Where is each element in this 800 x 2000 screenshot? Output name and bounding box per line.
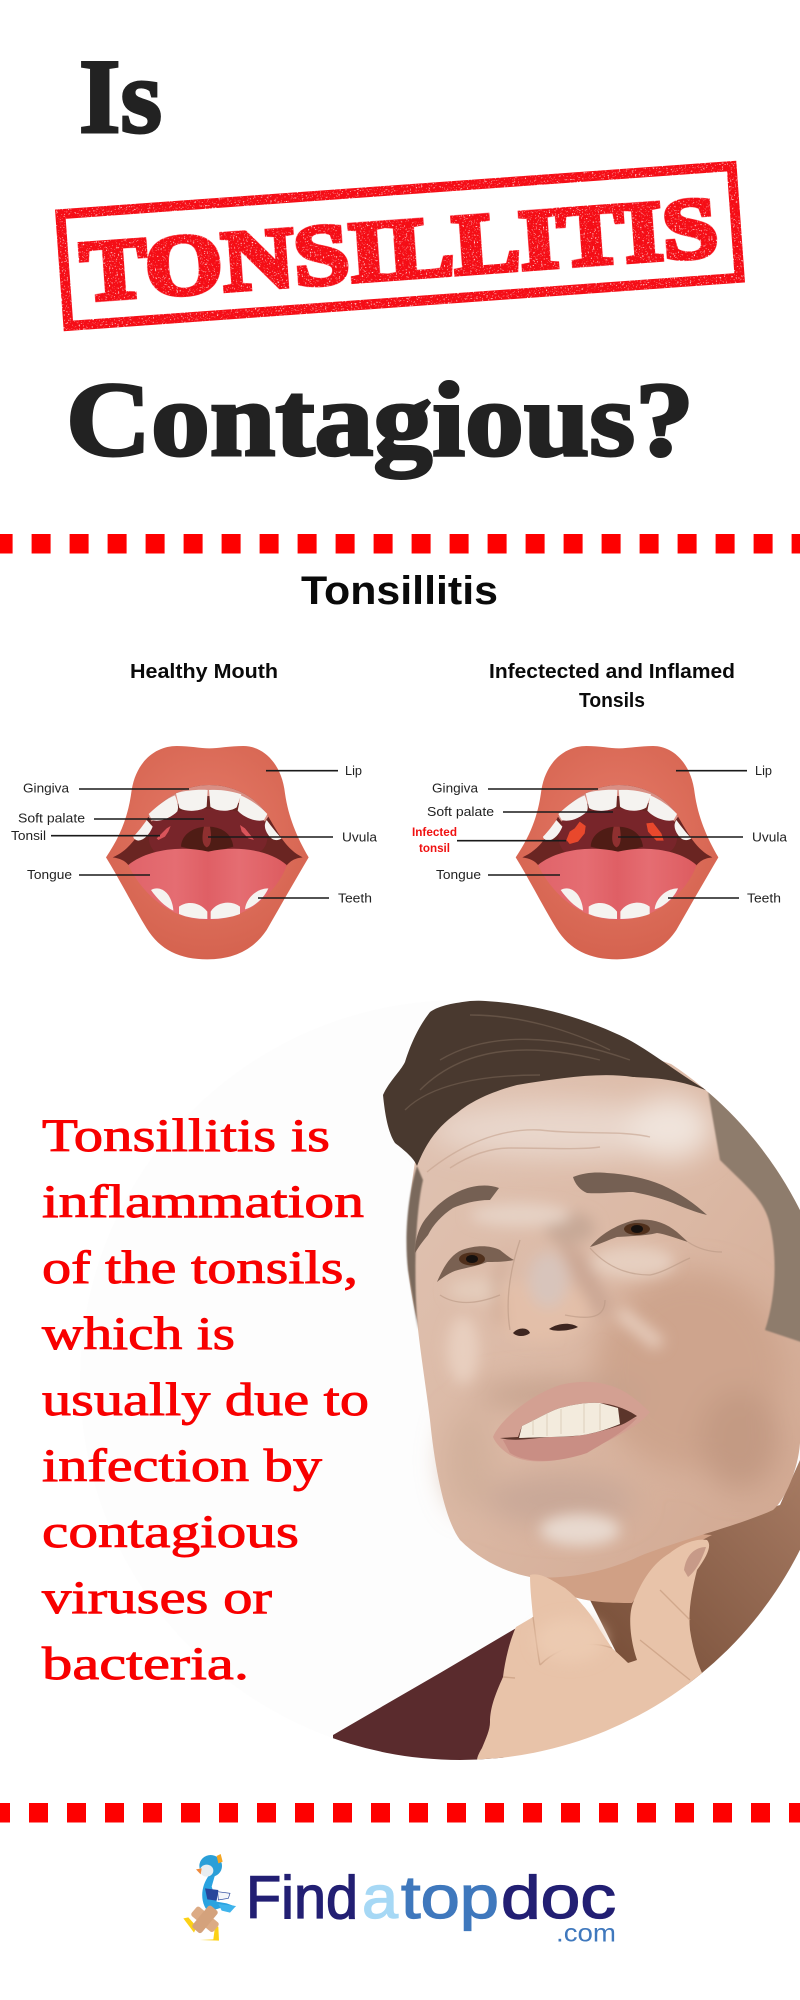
diagram: infected mouth (516, 746, 718, 959)
paragraph: what tonsillitis is: infection by (42, 1440, 323, 1492)
labels: infected mouth: Tongue (436, 867, 481, 882)
forehead wrinkles (427, 1130, 650, 1172)
labels: infected mouth: Soft palate (427, 804, 494, 819)
labels: infected mouth: Lip (755, 763, 772, 778)
labels: healthy mouth (11, 763, 378, 906)
labels: infected mouth (412, 763, 788, 906)
paragraph: what tonsillitis is (42, 1110, 369, 1690)
logo wordmark: Findatopdoc.com: top (401, 1864, 499, 1931)
heading: Tonsillitis: Tonsillitis (301, 569, 498, 613)
photo: man holding his throat in a circle (333, 1000, 800, 1760)
labels: infected mouth: Uvula (752, 830, 788, 845)
lips and teeth (493, 1382, 650, 1461)
paragraph: what tonsillitis is: inflammation (42, 1176, 364, 1228)
eyebrows (415, 1172, 707, 1253)
labels: infected mouth: tonsil (419, 841, 450, 855)
labels: healthy mouth: Tonsil (11, 828, 46, 843)
labels: infected mouth: Gingiva (432, 781, 479, 796)
labels: healthy mouth: Gingiva (23, 781, 70, 796)
dotted divider top (0, 534, 800, 554)
paragraph: what tonsillitis is: contagious (42, 1506, 299, 1558)
hair and sideburns (383, 1001, 800, 1345)
logo wordmark: Findatopdoc.com: Find (246, 1864, 358, 1931)
logo wordmark: Findatopdoc.com: .com (556, 1920, 616, 1948)
labels: infected mouth: Teeth (747, 891, 781, 906)
paragraph: what tonsillitis is: of the tonsils, (42, 1242, 358, 1294)
labels: healthy mouth: Lip (345, 763, 362, 778)
title word: Is: Is (79, 38, 162, 155)
heading: Infected and Inflamed Tonsils: Tonsils (579, 690, 645, 712)
title word: Contagious?: Contagious? (66, 361, 694, 478)
right eye (590, 1220, 688, 1247)
hand (477, 1540, 720, 1770)
paragraph: what tonsillitis is: bacteria. (42, 1638, 249, 1690)
labels: healthy mouth: Teeth (338, 891, 372, 906)
dotted divider bottom (0, 1803, 800, 1822)
logo wordmark: Findatopdoc.com: doc (501, 1864, 616, 1931)
paragraph: what tonsillitis is: viruses or (42, 1572, 272, 1624)
stamp: TONSILLITIS (60, 166, 740, 326)
labels: healthy mouth: Uvula (342, 830, 378, 845)
paragraph: what tonsillitis is: Tonsillitis is (42, 1110, 330, 1162)
paragraph: what tonsillitis is: which is (42, 1308, 235, 1360)
heading: Healthy Mouth: Healthy Mouth (130, 661, 278, 683)
left eye (437, 1246, 514, 1282)
labels: healthy mouth: Soft palate (18, 811, 85, 826)
logo wordmark: Findatopdoc.com: a (362, 1864, 399, 1931)
diagram: healthy mouth (106, 746, 309, 959)
stamp: TONSILLITIS: TONSILLITIS (78, 178, 721, 320)
paragraph: what tonsillitis is: usually due to (42, 1374, 369, 1426)
labels: infected mouth: Infected (412, 825, 457, 839)
labels: healthy mouth: Tongue (27, 867, 72, 882)
heading: Infected and Inflamed Tonsils (489, 661, 735, 712)
nostrils (513, 1324, 578, 1336)
heading: Infected and Inflamed Tonsils: Infectected and Inflamed (489, 661, 735, 683)
under-eye and nose contours (440, 1240, 722, 1330)
logo wordmark: Findatopdoc.com (246, 1864, 616, 1948)
icon: mascot bird with bandage (183, 1854, 236, 1941)
